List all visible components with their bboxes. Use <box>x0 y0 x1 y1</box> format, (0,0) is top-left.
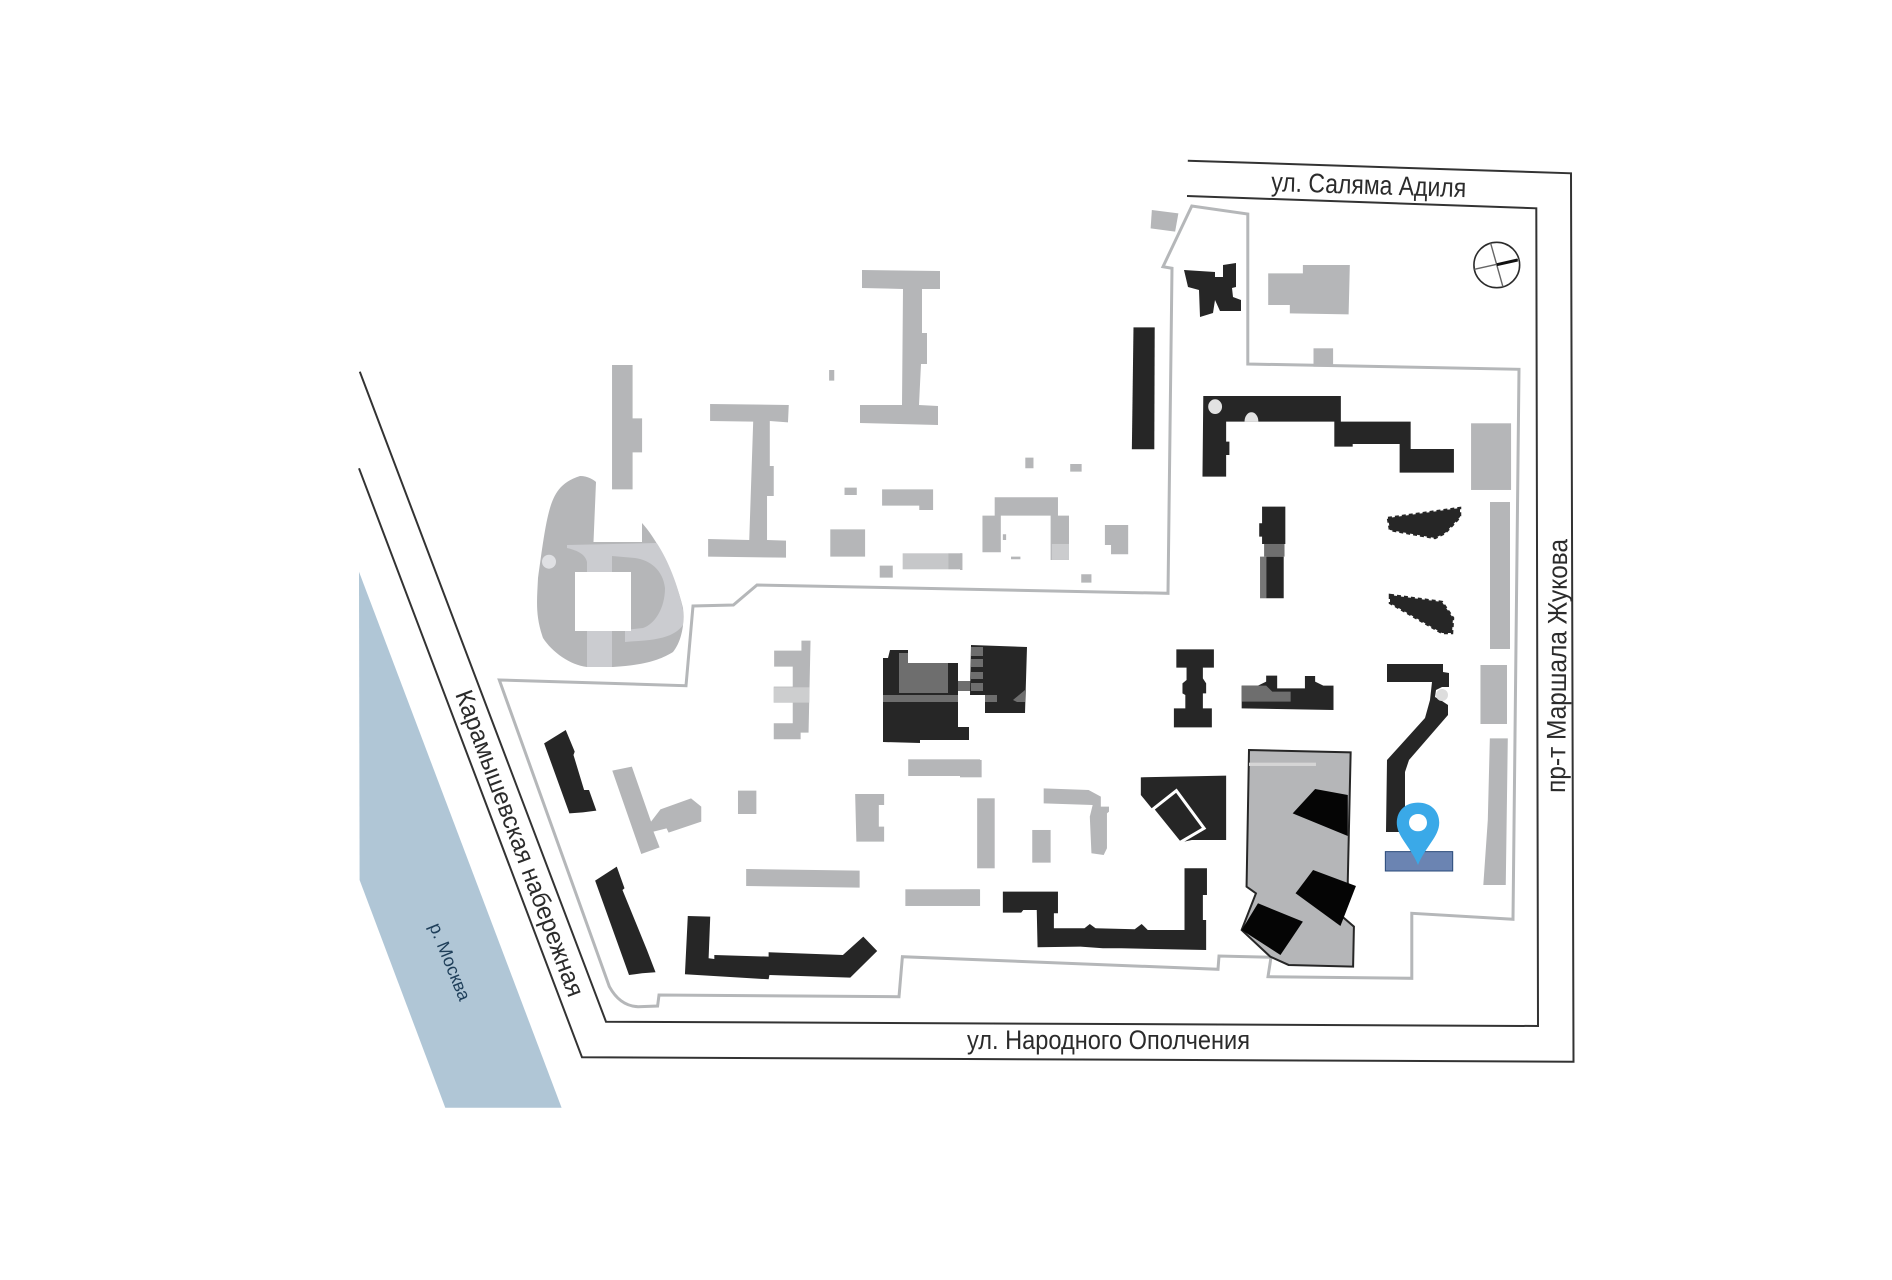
highlighted grey plot with towers <box>1242 750 1453 967</box>
grey neighbouring buildings, south-centre <box>960 665 1508 906</box>
north I-shaped building <box>860 270 940 425</box>
tower 1 <box>1388 508 1460 538</box>
target plot <box>1385 852 1453 871</box>
river-side block 2 <box>595 867 656 975</box>
icon: location pin <box>1397 803 1439 865</box>
street label: Salyama Adilya: ул. Саляма Адиля <box>1271 167 1467 203</box>
west wing grey roof <box>883 653 972 702</box>
diamond block <box>1141 776 1226 843</box>
black cross-shaped building <box>1184 263 1241 317</box>
outer road outline <box>359 161 1574 1062</box>
long building <box>612 365 642 489</box>
tower 2 <box>1390 595 1453 633</box>
river-side block 1 <box>544 730 596 813</box>
stadium dot <box>542 555 556 569</box>
stadium <box>537 476 684 667</box>
I-shaped building <box>708 404 789 558</box>
street label: Narodnogo Opolcheniya: ул. Народного Ополчения <box>967 1025 1250 1055</box>
west wing <box>883 650 969 743</box>
street label: Marshal Zhukov avenue: пр-т Маршала Жукова <box>1541 538 1573 793</box>
plot <box>1242 750 1354 967</box>
east wing <box>970 645 1027 713</box>
small outbuildings <box>829 370 933 578</box>
grey neighbouring buildings, north-west <box>612 365 962 739</box>
black residential buildings, north-east <box>1132 327 1454 598</box>
stadium pitch <box>575 572 631 631</box>
tower 1 <box>1293 789 1348 836</box>
street label: Karamyshevskaya embankment: Карамышевская набережная <box>449 686 589 1001</box>
stadium stands <box>537 476 684 667</box>
stadium light stands <box>567 543 683 667</box>
narrow central block <box>1259 507 1285 598</box>
low block with annex <box>1242 676 1334 710</box>
courtyard dots <box>1208 399 1258 422</box>
stepped long building <box>1202 396 1454 477</box>
U-shaped block <box>1003 868 1207 950</box>
grey neighbouring buildings, south <box>612 759 980 906</box>
tower 2 <box>1296 870 1356 926</box>
tower 3 <box>1242 903 1303 955</box>
east wing grey roof <box>971 647 1025 702</box>
black residential buildings, south-east <box>1003 649 1334 950</box>
L-shaped block <box>685 916 877 979</box>
grey strip building along Zhukov avenue <box>1490 502 1510 649</box>
inner road outline <box>360 196 1538 1026</box>
snake building courtyard dot <box>1436 689 1448 701</box>
central comb building <box>774 641 811 739</box>
slab building <box>1132 327 1155 449</box>
river <box>359 572 562 1108</box>
icon: compass <box>1474 242 1520 288</box>
site boundary <box>499 206 1519 1007</box>
large central complex <box>883 645 1027 743</box>
symmetric cross building <box>1174 649 1214 727</box>
angled building <box>612 767 701 854</box>
black residential buildings, south-west <box>544 730 877 979</box>
serrated towers <box>1388 508 1460 633</box>
snake building <box>1386 664 1449 832</box>
river label: Moskva: р. Москва <box>425 920 475 1004</box>
grey neighbouring buildings, north-east <box>960 210 1511 583</box>
